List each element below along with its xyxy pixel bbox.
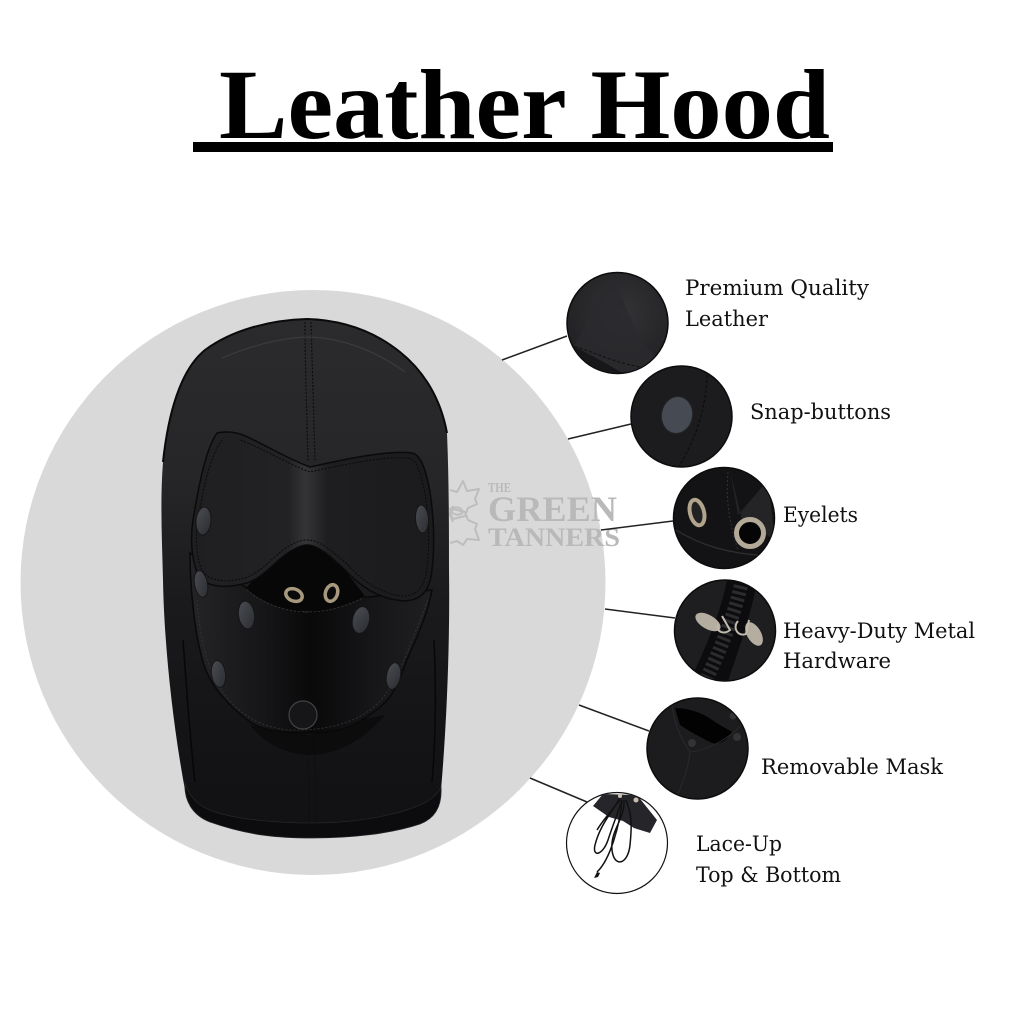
connector line: hardware (605, 609, 675, 618)
connector line: lace-up (530, 778, 587, 802)
label: premium quality leather (685, 276, 869, 331)
detail circle: eyelets (674, 468, 775, 568)
detail circle: metal hardware (674, 575, 776, 690)
chin shadow (250, 715, 385, 755)
title: Leather Hood (219, 49, 830, 160)
title underline (193, 142, 833, 152)
label: premium quality leather: Leather (685, 307, 769, 331)
dark outline highlight (163, 319, 447, 462)
front round snap (289, 701, 317, 729)
leather hood product (161, 319, 449, 838)
watermark: The Green Tanners: THE (488, 481, 511, 496)
detail circle: snap-button (631, 366, 732, 470)
grey backdrop circle (20, 290, 606, 875)
side panel seams (183, 640, 435, 782)
label: heavy-duty metal hardware: Heavy-Duty Metal (783, 619, 975, 643)
hood body (161, 319, 449, 838)
lower mask stitching (197, 590, 428, 730)
label: lace-up top and bottom: Lace-Up (696, 832, 782, 856)
connector line: removable mask (579, 705, 649, 731)
connector line: premium leather (502, 336, 567, 360)
icon: leaf logo (450, 481, 479, 545)
label: premium quality leather: Premium Quality (685, 276, 869, 300)
snap buttons (192, 505, 429, 691)
eye flap (192, 432, 434, 601)
lower mouth mask (190, 553, 432, 733)
label: heavy-duty metal hardware (783, 619, 975, 673)
label: lace-up top and bottom: Top & Bottom (696, 863, 841, 887)
watermark: The Green Tanners (450, 481, 620, 552)
watermark: The Green Tanners: TANNERS (488, 523, 620, 552)
label: removable mask: Removable Mask (761, 755, 943, 779)
mouth opening (246, 543, 365, 611)
detail circle: premium leather (565, 272, 668, 380)
connector line: snap buttons (568, 424, 631, 439)
eye flap stitching (197, 440, 429, 596)
watermark: The Green Tanners: GREEN (488, 489, 617, 529)
upper panel crease (222, 337, 405, 372)
label: heavy-duty metal hardware: Hardware (783, 649, 891, 673)
seam lines (305, 322, 316, 822)
detail circle: lace-up (566, 792, 668, 894)
label: snap-buttons: Snap-buttons (750, 400, 891, 424)
connector line: eyelets (601, 521, 673, 530)
brass eyelets (284, 583, 340, 604)
neck rim (185, 783, 441, 838)
label: lace-up top and bottom (696, 832, 841, 887)
detail circle: removable mask (647, 698, 748, 800)
label: eyelets: Eyelets (783, 503, 858, 527)
